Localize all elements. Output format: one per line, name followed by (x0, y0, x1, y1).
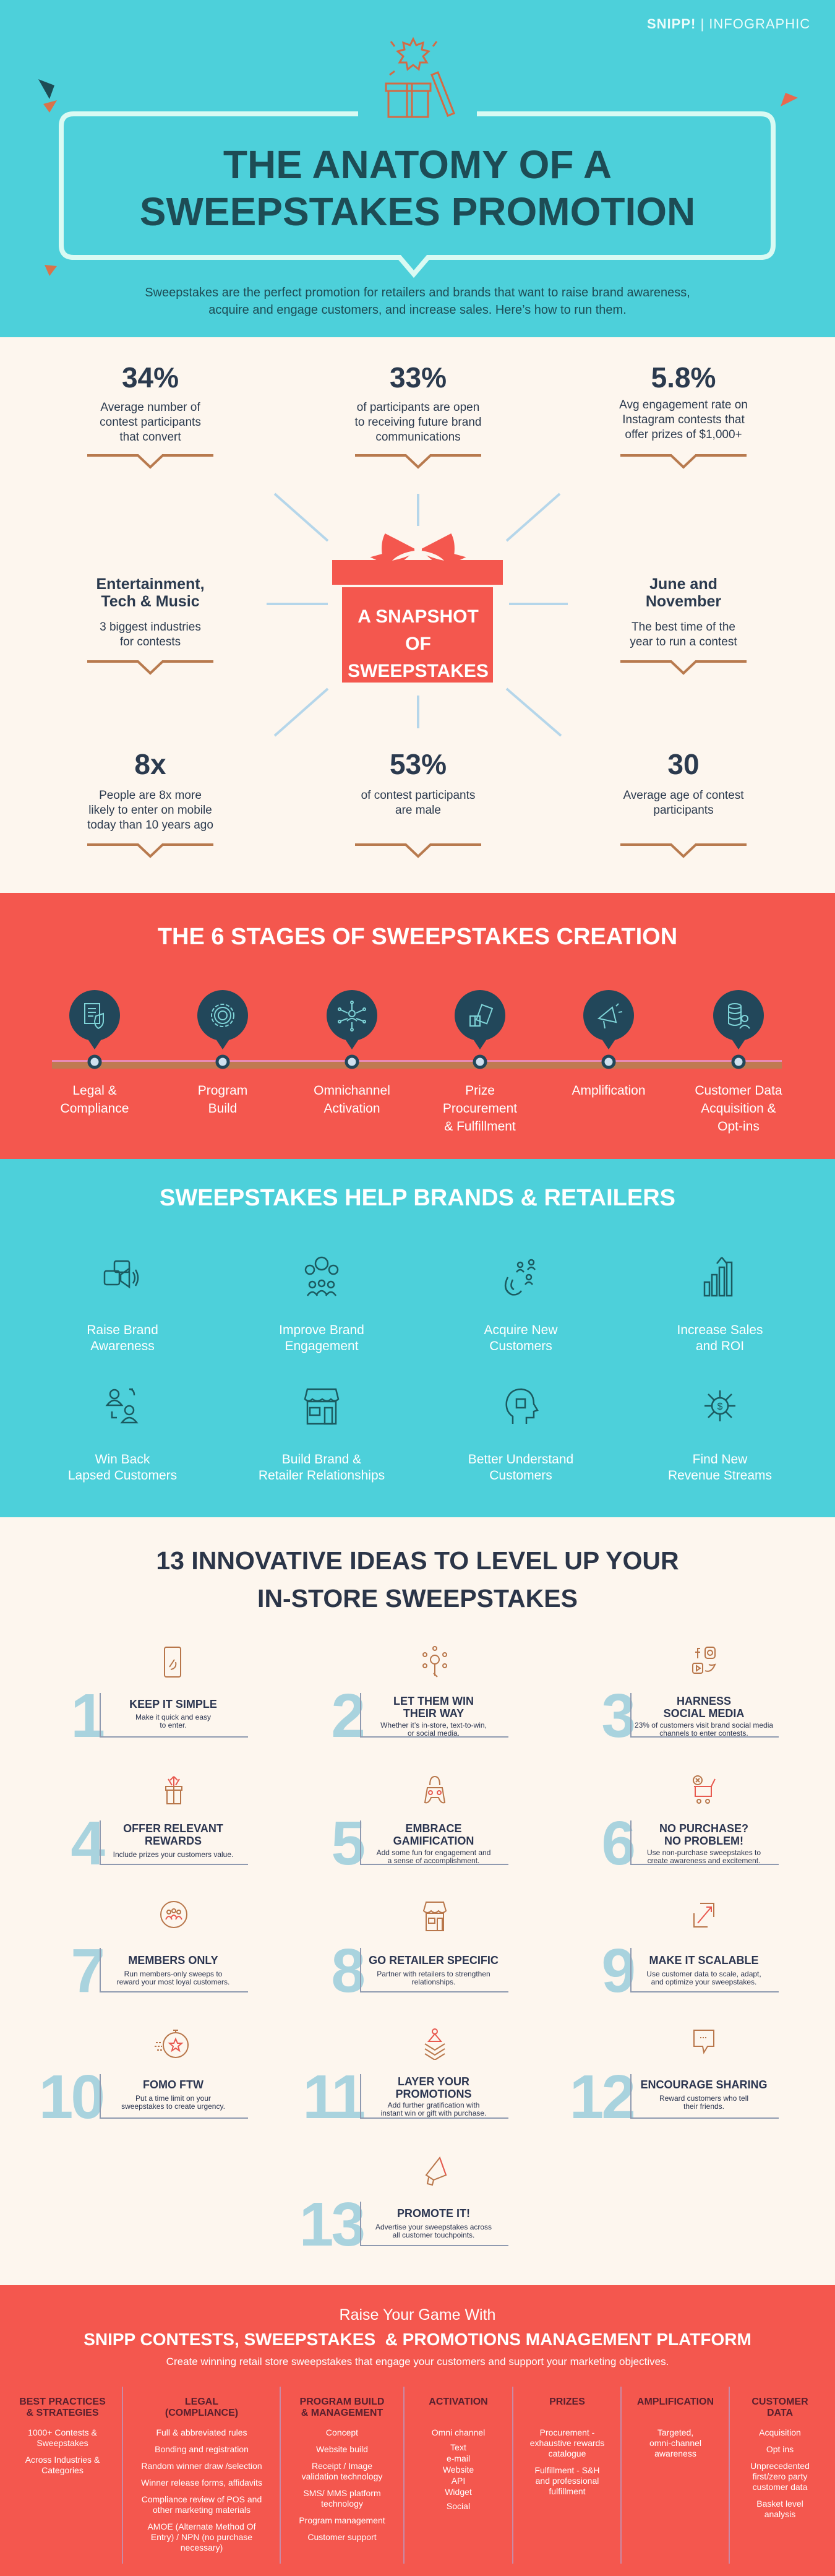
stat: 5.8%: Instagram contests that (622, 413, 745, 426)
column: activation: ACTIVATION (429, 2397, 488, 2407)
column: activation: Social (447, 2501, 470, 2511)
stat: 33%: to receiving future brand (355, 416, 481, 429)
card 11: instant win or gift with purchase. (381, 2109, 486, 2117)
benefit: increase sales: and ROI (696, 1339, 744, 1353)
benefit: improve brand engagement: Improve Brand (279, 1323, 364, 1337)
stage: program build (197, 990, 248, 1116)
card 5: Add some fun for engagement and (377, 1848, 490, 1857)
stage: legal: Legal & (72, 1083, 117, 1098)
card 4 (71, 1776, 248, 1878)
card 1: 1 (71, 1681, 103, 1751)
card 13: PROMOTE IT! (397, 2207, 470, 2220)
stage: customer data: Acquisition & (701, 1101, 776, 1116)
card 13: all customer touchpoints. (393, 2231, 474, 2239)
column: customer data: Unprecedented (750, 2461, 810, 2471)
gift box: snapshot: OF (405, 634, 431, 654)
card 3: SOCIAL MEDIA (664, 1707, 744, 1720)
card 9 (593, 1900, 784, 1992)
card 6 (601, 1775, 779, 1878)
card 2 (331, 1646, 508, 1751)
stat: June and November: June and (649, 575, 717, 593)
card 2: Whether it’s in-store, text-to-win, (380, 1721, 487, 1730)
column: program build (281, 2397, 403, 2543)
card 10: FOMO FTW (143, 2078, 203, 2091)
stat: 34%: contest participants (100, 416, 201, 429)
card 5: 5 (331, 1809, 363, 1878)
card 1: KEEP IT SIMPLE (129, 1698, 217, 1710)
stage: prize: Procurement (443, 1101, 517, 1116)
column: best practices: BEST PRACTICES (19, 2397, 106, 2407)
stage: amplification: Amplification (572, 1083, 646, 1098)
column: legal: necessary) (181, 2543, 223, 2552)
card 12: 12 (570, 2062, 633, 2132)
benefit: raise brand awareness: Raise Brand (87, 1323, 158, 1337)
card 3: HARNESS (677, 1695, 731, 1707)
stat: 33%: 33% (390, 361, 447, 394)
card 5 (331, 1776, 508, 1878)
column: legal: Winner release forms, affidavits (141, 2478, 262, 2488)
section: 6 stages: Opt-ins (717, 1119, 760, 1134)
column: best practices: Across Industries & (25, 2455, 100, 2465)
card 1 (71, 1647, 248, 1751)
stat: 34%: 34% (122, 361, 179, 394)
card 9: 9 (601, 1936, 633, 2005)
card 11: LAYER YOUR (398, 2075, 469, 2088)
benefit: understand customers: Better Understand (468, 1452, 573, 1467)
column: legal: Full & abbreviated rules (156, 2427, 247, 2437)
card 6: Use non-purchase sweepstakes to (647, 1848, 761, 1857)
stat: 34%: Average number of (100, 401, 200, 414)
section: platform (0, 2285, 835, 2576)
column: best practices: Categories (41, 2465, 84, 2475)
card 8 (331, 1902, 508, 2005)
card 9: Use customer data to scale, adapt, (646, 1970, 761, 1978)
column: program build: Receipt / Image (312, 2461, 372, 2471)
column: prizes: Fulfillment - S&H (534, 2465, 600, 2475)
stat: 33%: communications (375, 431, 461, 444)
card 12: Reward customers who tell (659, 2094, 748, 2103)
column: prizes: catalogue (549, 2449, 586, 2458)
section: help brands (0, 1159, 835, 1517)
heading: stages: THE 6 STAGES OF SWEEPSTAKES CREATION (158, 924, 677, 950)
column: legal: LEGAL (185, 2397, 218, 2407)
card 8: relationships. (412, 1978, 455, 1986)
card 12: their friends. (683, 2102, 724, 2111)
column: amplification: Targeted, (657, 2427, 693, 2437)
benefit: win back: Win Back (95, 1452, 150, 1467)
benefit: win back: Lapsed Customers (68, 1468, 177, 1483)
column: activation: e-mail (447, 2453, 470, 2463)
section: header teal (0, 0, 835, 337)
column: legal: Bonding and registration (155, 2444, 249, 2454)
benefit: improve brand engagement: Engagement (285, 1339, 359, 1353)
card 11: Add further gratification with (388, 2101, 479, 2109)
stat: 53%: are male (395, 804, 441, 817)
heading: 13 ideas (156, 1546, 679, 1613)
stage: prize (443, 990, 517, 1134)
card 10: 10 (39, 2062, 103, 2132)
heading: 13 ideas: 13 INNOVATIVE IDEAS TO LEVEL UP YOUR (156, 1546, 679, 1575)
column: best practices (4, 2397, 121, 2476)
benefit: increase sales: Increase Sales (677, 1323, 763, 1337)
card 8: GO RETAILER SPECIFIC (369, 1954, 499, 1966)
card 3 (601, 1647, 779, 1751)
card 2: or social media. (408, 1729, 460, 1738)
section: 6 stages (0, 893, 835, 1159)
heading: help brands: SWEEPSTAKES HELP BRANDS & RETAILERS (160, 1185, 675, 1211)
benefit: understand customers: Customers (489, 1468, 552, 1483)
column: program build: PROGRAM BUILD (300, 2397, 384, 2407)
benefit: revenue streams (668, 1390, 772, 1483)
stat: 33%: of participants are open (357, 401, 479, 414)
stage: omnichannel (314, 990, 390, 1116)
card 1: to enter. (160, 1721, 187, 1730)
column: activation: Widget (445, 2487, 472, 2497)
column: amplification: omni-channel (649, 2438, 701, 2448)
column: legal (124, 2397, 280, 2553)
card 11 (322, 2028, 514, 2121)
column: prizes: Procurement - (540, 2427, 594, 2437)
card 8: 8 (331, 1936, 363, 2005)
card 3: channels to enter contests. (659, 1729, 748, 1738)
stat: 5.8%: Avg engagement rate on (619, 398, 748, 411)
column: best practices: & STRATEGIES (26, 2408, 99, 2418)
stat: 8x: People are 8x more (99, 789, 202, 802)
benefit: raise brand awareness: Awareness (90, 1339, 155, 1353)
card 4: Include prizes your customers value. (113, 1850, 233, 1859)
timeline line (52, 1060, 782, 1069)
dividers (0, 2387, 835, 2566)
heading: raise your game: Raise Your Game With (340, 2306, 495, 2324)
column: legal: (COMPLIANCE) (165, 2408, 238, 2418)
benefit: retailer relationships (259, 1389, 385, 1483)
column: activation: Website (443, 2465, 474, 2475)
column: program build: Program management (299, 2515, 385, 2525)
card 6: 6 (601, 1809, 633, 1878)
card 6: NO PROBLEM! (664, 1835, 743, 1847)
stat: 53%: of contest participants (361, 789, 475, 802)
stat: 34% (87, 361, 213, 469)
section: 13 ideas (0, 1517, 835, 2285)
column: program build: Website build (316, 2444, 368, 2454)
stage: prize: Prize (465, 1083, 495, 1098)
title: SWEEPSTAKES PROMOTION (140, 189, 695, 234)
stat: industries: Entertainment, (96, 575, 205, 593)
card 13 (322, 2156, 514, 2249)
card 5: EMBRACE (405, 1822, 461, 1835)
bubble frame (59, 111, 776, 278)
card 10: sweepstakes to create urgency. (121, 2102, 225, 2111)
card 11: PROMOTIONS (395, 2088, 471, 2100)
stage: program build: Program (198, 1083, 247, 1098)
stat: 33% (355, 361, 481, 469)
column: legal: Entry) / NPN (no purchase (151, 2532, 252, 2542)
card 7: 7 (71, 1936, 103, 2005)
card 13: Advertise your sweepstakes across (375, 2223, 492, 2231)
stat: June and November (620, 575, 747, 675)
stat: industries: 3 biggest industries (100, 621, 201, 634)
stat: 8x: 8x (134, 748, 166, 780)
intro text: acquire and engage customers, and increase sales. Here’s how to run them. (208, 303, 627, 317)
card 7: reward your most loyal customers. (117, 1978, 229, 1986)
column: prizes: exhaustive rewards (530, 2438, 604, 2448)
section: 6 stages: & Fulfillment (444, 1119, 516, 1134)
stage: amplification (572, 990, 646, 1098)
benefit: acquire new customers (484, 1259, 558, 1353)
gift box: snapshot (332, 533, 503, 683)
stat: 5.8%: 5.8% (651, 361, 716, 394)
benefit: acquire new customers: Acquire New (484, 1323, 558, 1337)
stat: 8x: likely to enter on mobile (88, 804, 212, 817)
logo: SNIPP infographic: SNIPP! | INFOGRAPHIC (647, 16, 810, 32)
card 2: LET THEM WIN (393, 1695, 474, 1707)
card 12: ENCOURAGE SHARING (640, 2078, 767, 2091)
intro text: Sweepstakes are the perfect promotion for retailers and brands that want to raise brand awareness, (145, 286, 690, 299)
card 1: Make it quick and easy (135, 1713, 211, 1721)
card 7: MEMBERS ONLY (128, 1954, 218, 1966)
card 10 (62, 2028, 254, 2121)
column: customer data: CUSTOMER (751, 2397, 808, 2407)
stat: 8x: today than 10 years ago (87, 819, 213, 832)
card 11: 11 (302, 2062, 363, 2132)
benefit: acquire new customers: Customers (489, 1339, 552, 1353)
stat: industries (87, 575, 213, 675)
stage: program build: Build (208, 1101, 237, 1116)
stat: 5.8%: offer prizes of $1,000+ (625, 428, 742, 441)
column: program build: Concept (326, 2427, 358, 2437)
column: amplification (622, 2397, 729, 2459)
card 3: 3 (601, 1681, 633, 1751)
stat: 8x (87, 748, 213, 858)
stat: June and November: The best time of the (632, 621, 735, 634)
card 2: 2 (331, 1681, 363, 1751)
stat: June and November: year to run a contest (630, 635, 737, 648)
benefit: raise brand awareness (87, 1260, 158, 1353)
title (140, 142, 695, 234)
card 4: REWARDS (145, 1835, 202, 1847)
card 8: Partner with retailers to strengthen (377, 1970, 490, 1978)
stage: omnichannel: Activation (323, 1101, 380, 1116)
card 13: 13 (299, 2190, 363, 2259)
card 4: OFFER RELEVANT (123, 1822, 223, 1835)
column: program build: Customer support (307, 2532, 377, 2542)
column: amplification: AMPLIFICATION (637, 2397, 714, 2407)
column: prizes: PRIZES (549, 2397, 585, 2407)
column: legal: AMOE (Alternate Method Of (147, 2522, 256, 2531)
stage: customer data: Customer Data (695, 1083, 782, 1098)
column: program build: validation technology (302, 2471, 382, 2481)
card 5: GAMIFICATION (393, 1835, 474, 1847)
column: prizes: and professional (536, 2476, 599, 2486)
benefit: revenue streams: Revenue Streams (668, 1468, 772, 1483)
title: THE ANATOMY OF A (223, 142, 612, 187)
column: customer data: Acquisition (759, 2427, 801, 2437)
stat: 30: 30 (667, 748, 700, 780)
stat: 53% (355, 748, 481, 858)
column: legal: Compliance review of POS and (142, 2494, 262, 2504)
heading: platform: SNIPP CONTESTS, SWEEPSTAKES & PROMOTIONS MANAGEMENT PLATFORM (84, 2330, 751, 2349)
stage: omnichannel: Omnichannel (314, 1083, 390, 1098)
card 5: a sense of accomplishment. (388, 1856, 479, 1865)
icon: decorative triangles (38, 79, 798, 276)
benefit: understand customers (468, 1389, 573, 1483)
stat: 53%: 53% (390, 748, 447, 780)
column: customer data: Opt ins (766, 2444, 794, 2454)
column: amplification: awareness (654, 2449, 696, 2458)
column: customer data: customer data (753, 2482, 807, 2492)
column: customer data (730, 2397, 829, 2520)
gift box: snapshot: A SNAPSHOT (358, 606, 479, 627)
column: customer data: Basket level (756, 2499, 803, 2509)
benefit: improve brand engagement (279, 1256, 364, 1353)
column: activation: Omni channel (432, 2427, 485, 2437)
column: best practices: 1000+ Contests & (28, 2427, 97, 2437)
benefit: increase sales (677, 1257, 763, 1353)
stat: 30: Average age of contest (623, 789, 744, 802)
card 9: MAKE IT SCALABLE (649, 1954, 758, 1966)
stat: 5.8% (619, 361, 748, 469)
card 3: 23% of customers visit brand social media (635, 1721, 773, 1730)
stage: legal (61, 990, 129, 1116)
stat: 30 (620, 748, 747, 858)
column: customer data: DATA (767, 2408, 793, 2418)
column: customer data: analysis (764, 2509, 795, 2519)
stat: 34%: that convert (119, 431, 181, 444)
heading: 13 ideas: IN-STORE SWEEPSTAKES (257, 1584, 578, 1613)
column: legal: Random winner draw /selection (141, 2461, 262, 2471)
stage: customer data (695, 990, 782, 1134)
intro text (145, 286, 690, 317)
benefit: revenue streams: Find New (693, 1452, 747, 1467)
card 4: 4 (71, 1809, 103, 1878)
card 12 (593, 2028, 784, 2121)
benefit: retailer relationships: Build Brand & (282, 1452, 361, 1467)
column: prizes (514, 2397, 620, 2497)
column: activation: API (452, 2476, 465, 2486)
icon: gift with gavel (385, 37, 455, 118)
gift box: snapshot: SWEEPSTAKES (348, 661, 489, 681)
stat: industries: for contests (120, 635, 181, 648)
card 7: Run members-only sweeps to (124, 1970, 222, 1978)
column: customer data: first/zero party (753, 2471, 807, 2481)
card 6: NO PURCHASE? (659, 1822, 748, 1835)
column: activation: Text (450, 2442, 466, 2452)
rays (267, 493, 568, 736)
card 7 (71, 1901, 248, 2005)
card 9: and optimize your sweepstakes. (651, 1978, 756, 1986)
stat: 30: participants (653, 804, 714, 817)
column: program build: & MANAGEMENT (301, 2408, 383, 2418)
column: program build: technology (321, 2499, 363, 2509)
card 6: create awareness and excitement. (648, 1856, 760, 1865)
benefit: retailer relationships: Retailer Relationships (259, 1468, 385, 1483)
subheading: Create winning retail store sweepstakes that engage your customers and support your marketing objectives. (166, 2356, 669, 2367)
benefit: revenue streams: $ (717, 1402, 723, 1412)
column: activation (405, 2397, 512, 2512)
stat: industries: Tech & Music (101, 593, 200, 610)
stat: June and November: November (646, 593, 721, 610)
stage: legal: Compliance (61, 1101, 129, 1116)
section: snapshot (0, 337, 835, 893)
column: best practices: Sweepstakes (36, 2438, 88, 2448)
column: prizes: fulfillment (549, 2486, 586, 2496)
benefit: win back (68, 1389, 177, 1483)
card 2: THEIR WAY (403, 1707, 464, 1720)
column: legal: other marketing materials (153, 2505, 250, 2515)
column: program build: SMS/ MMS platform (303, 2488, 381, 2498)
card 10: Put a time limit on your (135, 2094, 211, 2103)
